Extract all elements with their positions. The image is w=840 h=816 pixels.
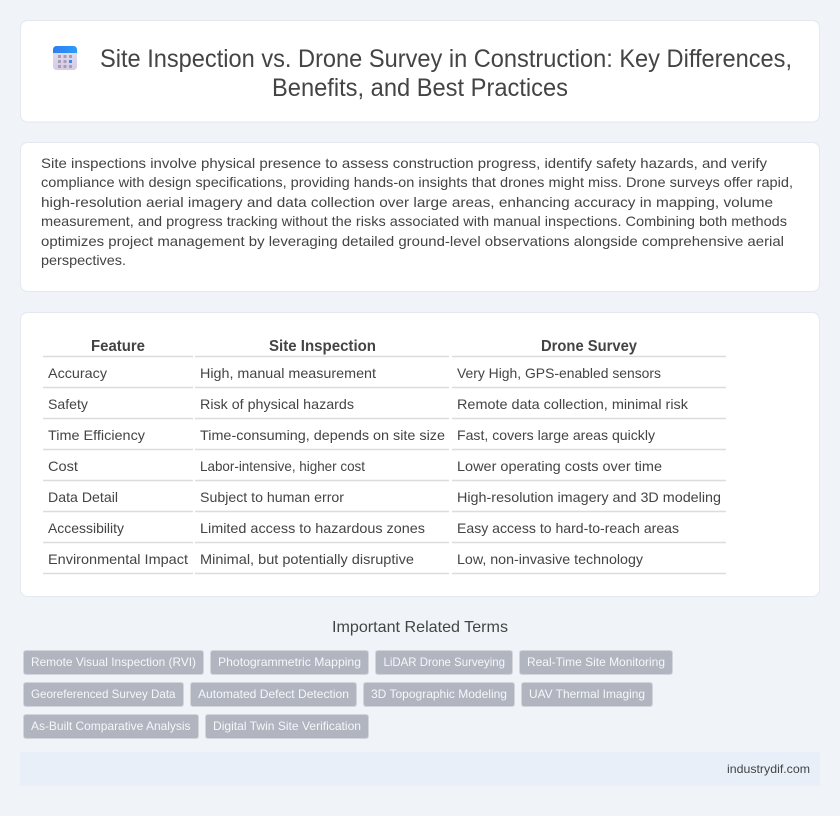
title [100, 45, 792, 102]
table row: data detail: Subject to human error [200, 489, 344, 505]
table row: accuracy: Very High, GPS-enabled sensors [457, 365, 661, 381]
tag: as-built comparative analysis: As-Built Comparative Analysis [31, 719, 190, 733]
tag: lidar drone surveying [376, 650, 512, 674]
table row: cost: Lower operating costs over time [457, 458, 662, 474]
tag: as-built comparative analysis [24, 714, 198, 738]
footer [20, 752, 820, 786]
panel: comparison table [20, 312, 820, 596]
table header [43, 338, 726, 356]
tag: photogrammetric mapping [210, 650, 368, 674]
tag: remote visual inspection [24, 650, 204, 674]
table row: accuracy: High, manual measurement [200, 365, 376, 381]
table row: time efficiency: Time Efficiency [48, 427, 145, 443]
table row: accessibility: Easy access to hard-to-reach areas [457, 520, 679, 536]
title: Site Inspection vs. Drone Survey in Construction: Key Differences, [100, 45, 792, 73]
table row: environmental impact [43, 551, 726, 574]
tag: lidar drone surveying: LiDAR Drone Surveying [384, 655, 505, 669]
title: Benefits, and Best Practices [272, 74, 568, 102]
text block: introduction: high-resolution aerial imagery and data collection over large areas, enhancing accuracy in mapping, volume [41, 194, 773, 210]
table row: accuracy: Accuracy [48, 365, 107, 381]
table row: safety: Risk of physical hazards [200, 396, 354, 412]
table header: Drone Survey [541, 338, 637, 355]
tag: real-time site monitoring: Real-Time Site Monitoring [527, 655, 665, 669]
tag: digital twin site verification [206, 714, 368, 738]
table row: cost: Cost [48, 458, 78, 474]
table header: Feature [91, 338, 145, 355]
table row: environmental impact: Low, non-invasive technology [457, 551, 643, 567]
footer: industrydif.com [727, 762, 810, 776]
table row: cost: Labor-intensive, higher cost [200, 458, 365, 474]
tag: digital twin site verification: Digital Twin Site Verification [213, 719, 361, 733]
table row: environmental impact: Environmental Impact [48, 551, 188, 567]
table row: environmental impact: Minimal, but potentially disruptive [200, 551, 414, 567]
heading: related terms: Important Related Terms [332, 619, 508, 636]
table row: safety: Remote data collection, minimal risk [457, 396, 689, 412]
text block: introduction [41, 155, 793, 268]
tag: uav thermal imaging: UAV Thermal Imaging [529, 687, 645, 701]
text block: introduction: measurement, and progress tracking without the risks associated with manual inspections. Combining both methods [41, 213, 787, 229]
table row: cost [43, 458, 726, 480]
table row: safety [43, 396, 726, 418]
tag: automated defect detection: Automated Defect Detection [198, 687, 349, 701]
tag: photogrammetric mapping: Photogrammetric Mapping [218, 655, 361, 669]
text block: introduction: compliance with design specifications, providing hands-on insights that drones might miss. Drone surveys offer rapid, [41, 174, 793, 190]
text block: introduction: Site inspections involve physical presence to assess construction progress, identify safety hazards, and verify [41, 155, 767, 171]
tag: 3d topographic modeling: 3D Topographic Modeling [371, 687, 507, 701]
tag: uav thermal imaging [522, 682, 652, 706]
text block: introduction: perspectives. [41, 252, 126, 268]
tag: georeferenced survey data: Georeferenced Survey Data [31, 687, 176, 701]
tag: real-time site monitoring [520, 650, 672, 674]
tag: georeferenced survey data [24, 682, 184, 706]
tag: remote visual inspection: Remote Visual Inspection (RVI) [31, 655, 196, 669]
table row: accessibility: Accessibility [48, 520, 124, 536]
table row: safety: Safety [48, 396, 88, 412]
panel: title card [20, 20, 820, 122]
table header: Site Inspection [269, 338, 376, 355]
panel: introduction text [20, 142, 820, 292]
table row: accuracy [43, 365, 726, 388]
text block: introduction: optimizes project management by leveraging detailed ground-level observations alongside comprehensive aerial [41, 233, 784, 249]
table row: accessibility: Limited access to hazardous zones [200, 520, 425, 536]
tag: automated defect detection [190, 682, 356, 706]
table row: data detail [43, 489, 726, 512]
table row: time efficiency: Time-consuming, depends on site size [200, 427, 445, 443]
table row: data detail: High-resolution imagery and 3D modeling [457, 489, 721, 505]
table row: accessibility [43, 520, 726, 542]
icon: calendar [53, 46, 77, 70]
table row: data detail: Data Detail [48, 489, 118, 505]
table row: time efficiency: Fast, covers large areas quickly [457, 427, 655, 443]
tag: 3d topographic modeling [364, 682, 514, 706]
tag group: related terms [24, 650, 672, 738]
table row: time efficiency [43, 427, 726, 450]
